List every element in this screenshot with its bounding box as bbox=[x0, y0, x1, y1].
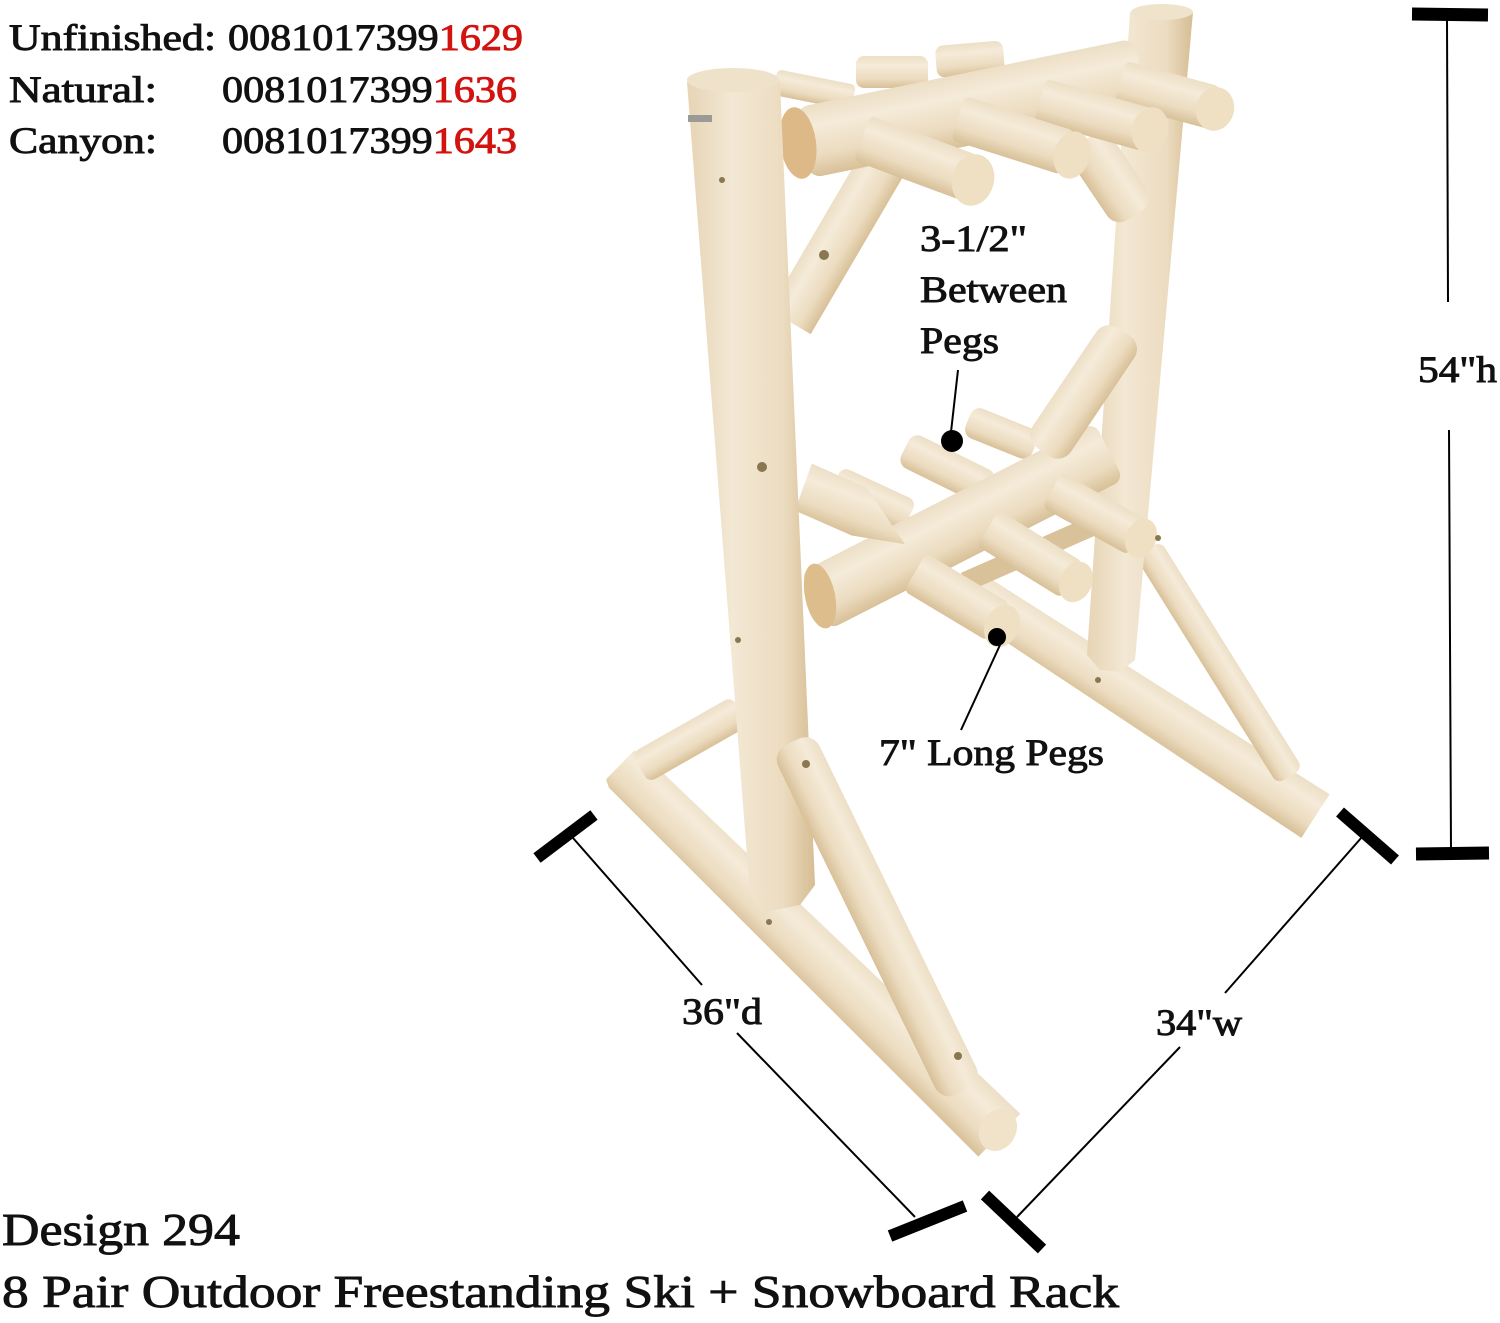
lower back peg b bbox=[897, 432, 998, 506]
depth dimension bbox=[537, 815, 965, 1236]
product codes: Natural: bbox=[9, 70, 157, 111]
right post bbox=[1087, 12, 1193, 672]
callout: peg spacing: Between bbox=[920, 270, 1067, 311]
lower peg front bbox=[904, 553, 1027, 653]
hardware and knots bbox=[688, 115, 1161, 1060]
lower diagonal brace bbox=[1024, 319, 1143, 465]
upper left brace bbox=[769, 150, 904, 334]
depth label: 36"d bbox=[682, 992, 763, 1033]
title: 8 Pair Outdoor Freestanding Ski + Snowboard Rack bbox=[2, 1266, 1119, 1317]
product codes: 0081017399 1643 bbox=[222, 121, 517, 162]
lower peg right bbox=[1042, 473, 1163, 562]
lower back peg c bbox=[962, 405, 1041, 462]
width dimension bbox=[985, 812, 1395, 1249]
lower connecting log bbox=[965, 527, 1090, 582]
callout: peg spacing: Pegs bbox=[920, 321, 999, 362]
lower crossbar bbox=[800, 423, 1124, 630]
leader: peg spacing bbox=[941, 370, 963, 452]
left post bbox=[687, 82, 815, 912]
top peg 3 bbox=[1034, 79, 1173, 157]
top back peg b bbox=[856, 56, 928, 88]
top back peg a bbox=[772, 69, 856, 110]
left post top bbox=[687, 68, 779, 92]
front left base log bbox=[599, 744, 1020, 1157]
top crossbar bbox=[796, 38, 1148, 178]
lower peg middle bbox=[977, 510, 1099, 608]
top peg 2 bbox=[951, 96, 1096, 183]
title bbox=[2, 1204, 1119, 1317]
back right base log bbox=[961, 573, 1330, 838]
top peg 4 bbox=[1114, 61, 1239, 135]
lower left brace bbox=[793, 464, 920, 554]
product codes: Unfinished: bbox=[9, 18, 216, 59]
upper right brace bbox=[1065, 127, 1155, 228]
product codes: 0081017399 1636 bbox=[222, 70, 517, 111]
right post top bbox=[1131, 4, 1193, 20]
front brace bbox=[771, 732, 983, 1102]
top peg 1 bbox=[854, 115, 1000, 211]
height label: 54"h bbox=[1418, 350, 1498, 391]
top crossbar end bbox=[775, 105, 821, 181]
width label: 34"w bbox=[1156, 1003, 1242, 1044]
title: Design 294 bbox=[2, 1204, 240, 1255]
product codes: Canyon: bbox=[9, 121, 157, 162]
callout: peg spacing: 3-1/2" bbox=[920, 219, 1027, 260]
height dimension bbox=[1412, 14, 1489, 854]
product codes bbox=[9, 18, 523, 162]
callout: peg length: 7" Long Pegs bbox=[879, 733, 1104, 774]
back right brace bbox=[1135, 541, 1303, 784]
leader: peg length bbox=[961, 628, 1006, 730]
lower back peg a bbox=[828, 467, 917, 532]
ski rack illustration bbox=[599, 4, 1330, 1158]
top back peg c bbox=[935, 40, 1005, 78]
front back brace bbox=[632, 696, 748, 783]
product codes: 0081017399 1629 bbox=[228, 18, 523, 59]
lower crossbar end bbox=[798, 561, 842, 631]
front base log end bbox=[971, 1102, 1025, 1158]
callout: peg spacing bbox=[920, 219, 1067, 362]
